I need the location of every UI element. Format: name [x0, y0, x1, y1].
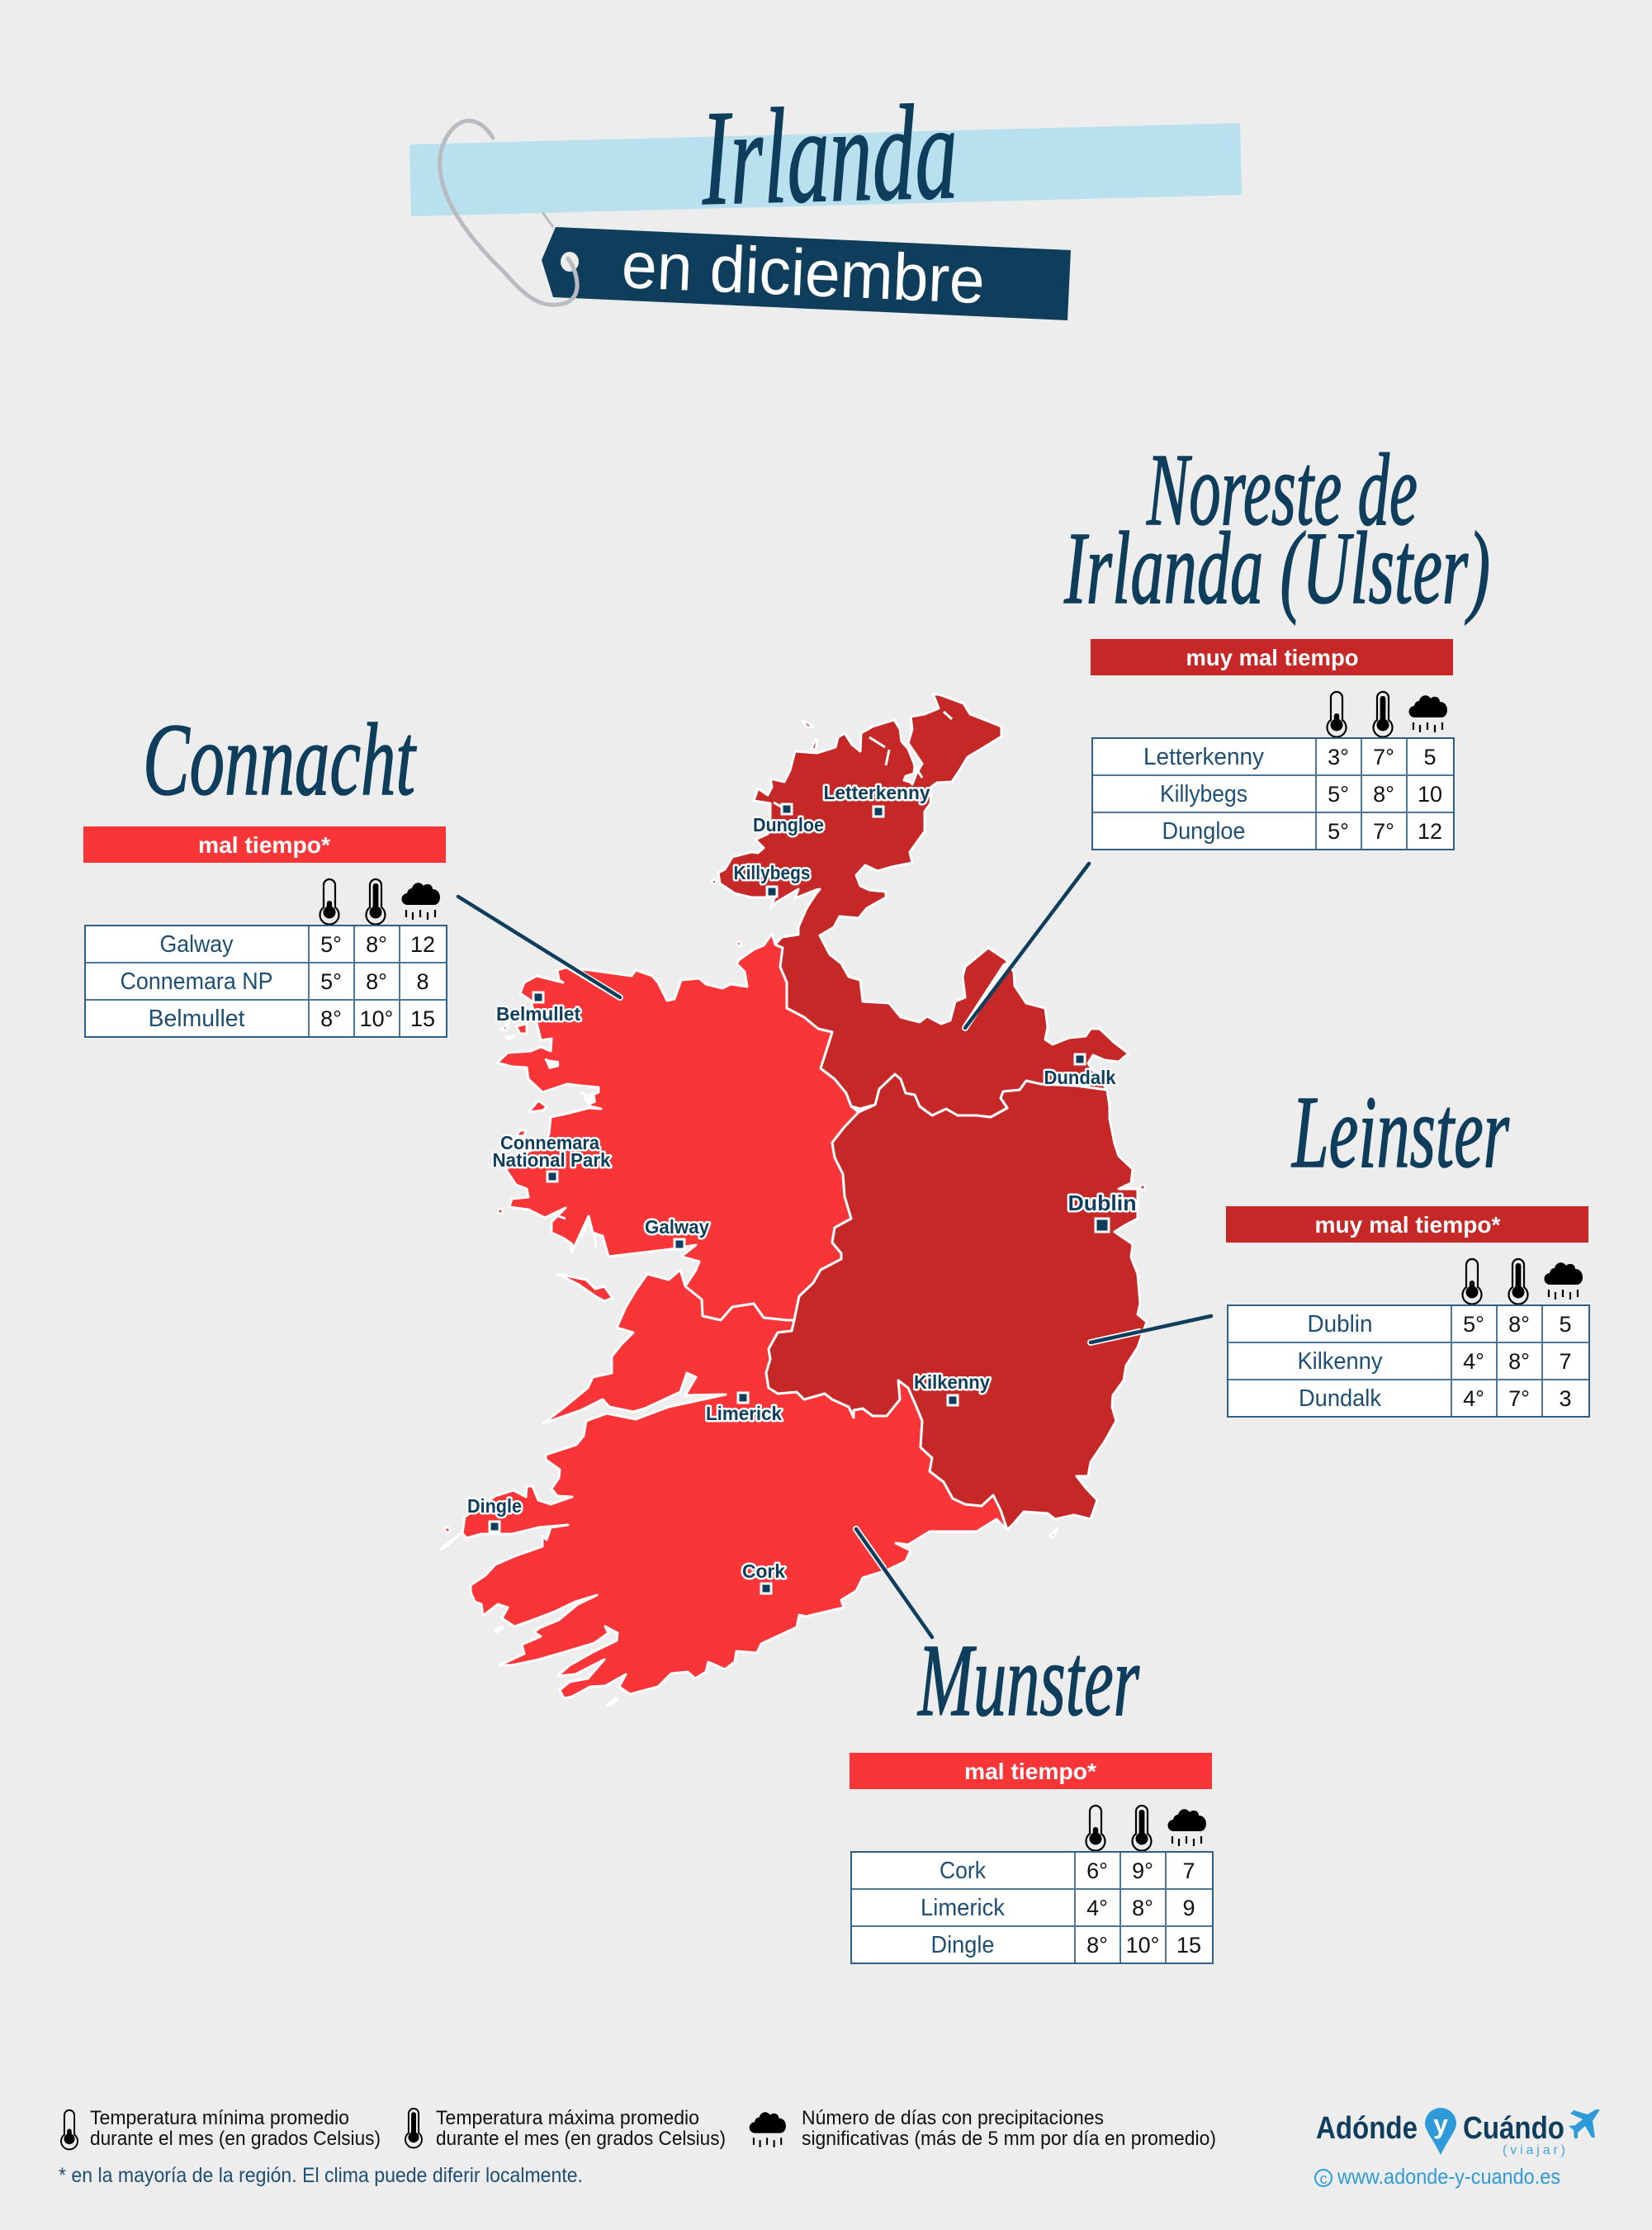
climate table: 6° [1086, 1858, 1108, 1883]
climate table: 8° [366, 969, 387, 994]
rating bar [850, 1753, 1212, 1789]
city: Dungloe [753, 804, 824, 836]
legend text: rain days: significativas (más de 5 mm por día en promedio) [802, 2128, 1216, 2150]
legend [59, 2107, 1216, 2187]
climate table: 12 [410, 932, 435, 957]
logo tagline: (viajar) [1503, 2143, 1565, 2157]
climate table: 7 [1182, 1858, 1195, 1883]
copyright and website: c [1319, 2171, 1328, 2187]
island: Achill small [506, 1036, 514, 1039]
tag hole [561, 252, 579, 272]
legend text: max temperature: durante el mes (en grados Celsius) [436, 2128, 726, 2150]
city: Belmullet: Belmullet [496, 1003, 580, 1025]
climate table: 10° [1126, 1933, 1159, 1958]
icon: max temperature [1374, 692, 1392, 737]
climate table [1092, 738, 1454, 850]
icon: rain days [1167, 1809, 1206, 1846]
climate table: 7 [1559, 1349, 1572, 1374]
light blue banner [409, 123, 1242, 216]
climate table: 3 [1559, 1386, 1572, 1411]
legend text: min temperature: Temperatura mínima promedio [90, 2107, 349, 2129]
city: Letterkenny: Letterkenny [824, 782, 930, 803]
climate table: Dublin [1308, 1311, 1372, 1338]
city: Connemara National Park [492, 1132, 611, 1181]
logo: Adónde y Cuándo [1315, 2108, 1600, 2189]
island: small Sligo [736, 941, 741, 946]
island: Dursey [607, 1698, 618, 1705]
icon: min temperature [1328, 692, 1346, 737]
city: Cork: Cork [742, 1560, 785, 1582]
climate table: 8° [1373, 782, 1394, 807]
title group [409, 76, 1242, 320]
climate table: Kilkenny [1298, 1348, 1383, 1375]
city: Limerick [706, 1393, 782, 1424]
heading: Noreste de Irlanda (Ulster) [1063, 433, 1490, 626]
city: Connemara National Park: Connemara [500, 1132, 599, 1153]
icon: rain days [1408, 695, 1447, 732]
tag shape [542, 227, 1071, 320]
climate table: 15 [410, 1006, 435, 1031]
city: Letterkenny [824, 782, 930, 817]
panel: Connacht [83, 703, 447, 1037]
climate table: 7° [1508, 1386, 1530, 1411]
climate table: 5° [1328, 782, 1349, 807]
climate table: 4° [1463, 1386, 1484, 1411]
climate table: Connemara NP [121, 968, 272, 995]
climate table: 7° [1373, 745, 1394, 769]
city: Dingle [467, 1495, 522, 1532]
rating bar: mal tiempo* [198, 832, 330, 858]
lough inlets [545, 712, 952, 1248]
island: Mullet small [501, 1022, 509, 1030]
city: Dungloe: Dungloe [753, 814, 824, 836]
legend text: max temperature: Temperatura máxima promedio [436, 2107, 699, 2129]
island: Clare [528, 1101, 547, 1112]
heading: Connacht: Connacht [143, 703, 417, 817]
island: small west [498, 1209, 503, 1214]
island: Arranmore [812, 739, 817, 750]
lake: Clew Bay [585, 1091, 596, 1106]
icon: min temperature [320, 879, 338, 925]
logo pin [1425, 2108, 1456, 2155]
island: Lambay [1140, 1185, 1145, 1190]
icon: min temperature [1463, 1259, 1481, 1304]
climate table: Dingle [931, 1932, 994, 1958]
climate table: Limerick [921, 1895, 1005, 1921]
region: Northeast / Ulster [718, 694, 1129, 1117]
leader line: Connacht [458, 897, 620, 997]
city: Connemara National Park: National Park [492, 1149, 611, 1171]
climate table: 5° [320, 969, 342, 994]
climate table: 10° [360, 1006, 393, 1031]
logo plane [1569, 2109, 1600, 2138]
title: Irlanda: Irlanda [699, 76, 959, 234]
rating bar: muy mal tiempo [1186, 645, 1359, 670]
cord short segment [542, 212, 553, 227]
city: Belmullet [496, 992, 580, 1025]
heading: Noreste de Irlanda (Ulster): Noreste de [1146, 433, 1418, 547]
climate table: 5° [1328, 819, 1349, 844]
rating bar [83, 826, 446, 863]
rating bar [1091, 639, 1453, 675]
climate table: Dungloe [1162, 818, 1245, 845]
panel: Munster [850, 1624, 1213, 1963]
panel: Ulster [1063, 433, 1490, 850]
map city labels [467, 782, 1136, 1593]
climate table: 5° [1463, 1312, 1484, 1337]
legend icon: max temperature [405, 2109, 422, 2147]
rating bar: mal tiempo* [964, 1759, 1096, 1784]
city: Kilkenny [914, 1371, 990, 1405]
climate table [85, 926, 447, 1037]
region: Connacht [497, 934, 859, 1320]
island: small Kerry [445, 1527, 450, 1532]
region: Munster [462, 1270, 1007, 1698]
rating bar: muy mal tiempo* [1314, 1212, 1501, 1238]
legend text: rain days: Número de días con precipitaciones [802, 2107, 1104, 2129]
climate table: 4° [1463, 1349, 1484, 1374]
island: Mullet south [516, 1024, 527, 1034]
climate table [1228, 1305, 1589, 1417]
island: Blasket [440, 1534, 460, 1550]
climate table: 8 [416, 969, 429, 994]
legend icon: min temperature [61, 2110, 78, 2149]
copyright and website: www.adonde-y-cuando.es [1337, 2164, 1560, 2189]
region: Leinster [766, 1074, 1147, 1530]
city: Killybegs: Killybegs [733, 862, 811, 883]
heading: Leinster: Leinster [1291, 1076, 1510, 1190]
legend text: min temperature: durante el mes (en grados Celsius) [90, 2128, 381, 2150]
legend text: min temperature [90, 2107, 381, 2150]
climate table: 5 [1559, 1312, 1572, 1337]
island: Aran [557, 1274, 613, 1301]
city: Dundalk [1044, 1054, 1116, 1088]
legend text: max temperature [436, 2107, 726, 2150]
climate table: Letterkenny [1143, 744, 1264, 770]
climate table: Cork [940, 1858, 986, 1884]
climate table: 4° [1086, 1896, 1108, 1920]
leader line: Munster [856, 1529, 932, 1637]
climate table: 10 [1418, 782, 1442, 807]
city: Killybegs [733, 862, 811, 897]
lake: Mayo [545, 1059, 559, 1069]
climate table: 7° [1373, 819, 1394, 844]
leader line: Leinster [1091, 1316, 1211, 1342]
heading: Munster: Munster [917, 1624, 1140, 1738]
climate table: Dundalk [1299, 1385, 1381, 1412]
climate table: Galway [160, 931, 234, 958]
climate table: 9 [1182, 1896, 1195, 1920]
city: Cork [742, 1560, 785, 1593]
legend text: rain days [802, 2107, 1216, 2150]
climate table: 8° [1132, 1896, 1153, 1920]
climate table: 8° [1086, 1933, 1108, 1958]
footnote: * en la mayoría de la región. El clima puede diferir localmente. [59, 2164, 583, 2187]
panel: Leinster [1226, 1076, 1589, 1417]
climate table: 8° [366, 932, 387, 957]
logo word: Adónde: Adónde [1316, 2111, 1418, 2146]
city: Dublin: Dublin [1068, 1191, 1136, 1215]
climate table: 12 [1418, 819, 1442, 844]
island: Inishturk [516, 1130, 526, 1136]
climate table: 8° [1508, 1312, 1530, 1337]
climate table: Belmullet [149, 1006, 244, 1032]
city: Limerick: Limerick [706, 1403, 782, 1424]
rating bar [1226, 1206, 1588, 1243]
climate table: 9° [1132, 1858, 1153, 1883]
city: Dundalk: Dundalk [1044, 1067, 1116, 1088]
island: Tory [802, 721, 813, 727]
climate table: 3° [1328, 745, 1349, 769]
leader line: Ulster [965, 864, 1089, 1028]
city: Kilkenny: Kilkenny [914, 1371, 990, 1393]
island: Skellig [495, 1626, 502, 1632]
subtitle: en diciembre: en diciembre [620, 228, 987, 317]
icon: rain days [1544, 1262, 1583, 1300]
city: Galway: Galway [645, 1216, 709, 1238]
climate table: Killybegs [1160, 781, 1247, 807]
icon: rain days [401, 883, 440, 920]
icon: max temperature [1509, 1259, 1527, 1304]
island: small Donegal [712, 880, 717, 883]
map of Ireland [440, 694, 1147, 1705]
climate table [851, 1852, 1213, 1963]
legend icon: rain days [750, 2112, 786, 2147]
icon: max temperature [1133, 1806, 1151, 1851]
icon: min temperature [1086, 1806, 1105, 1851]
climate table: 8° [320, 1006, 342, 1031]
climate table: 8° [1508, 1349, 1530, 1374]
city: Dingle: Dingle [467, 1495, 522, 1517]
city: Galway [645, 1216, 709, 1249]
city: Dublin [1068, 1191, 1136, 1232]
logo word: Cuándo: Cuándo [1463, 2111, 1564, 2146]
climate table: 5° [320, 932, 342, 957]
climate table: 5 [1423, 745, 1437, 769]
icon: max temperature [367, 879, 385, 925]
island: Saltee [1050, 1528, 1058, 1537]
tag cord [440, 121, 577, 305]
climate table: 15 [1176, 1933, 1201, 1958]
logo pin: y [1433, 2109, 1448, 2139]
